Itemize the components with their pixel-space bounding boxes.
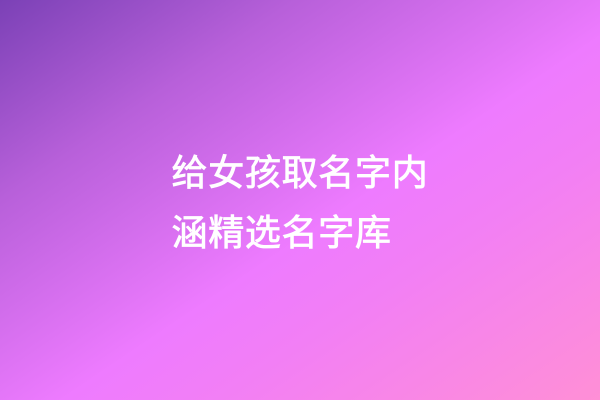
title: 给女孩取名字内 — [172, 152, 428, 192]
title: 涵精选名字库 — [172, 212, 392, 252]
title — [172, 152, 428, 252]
